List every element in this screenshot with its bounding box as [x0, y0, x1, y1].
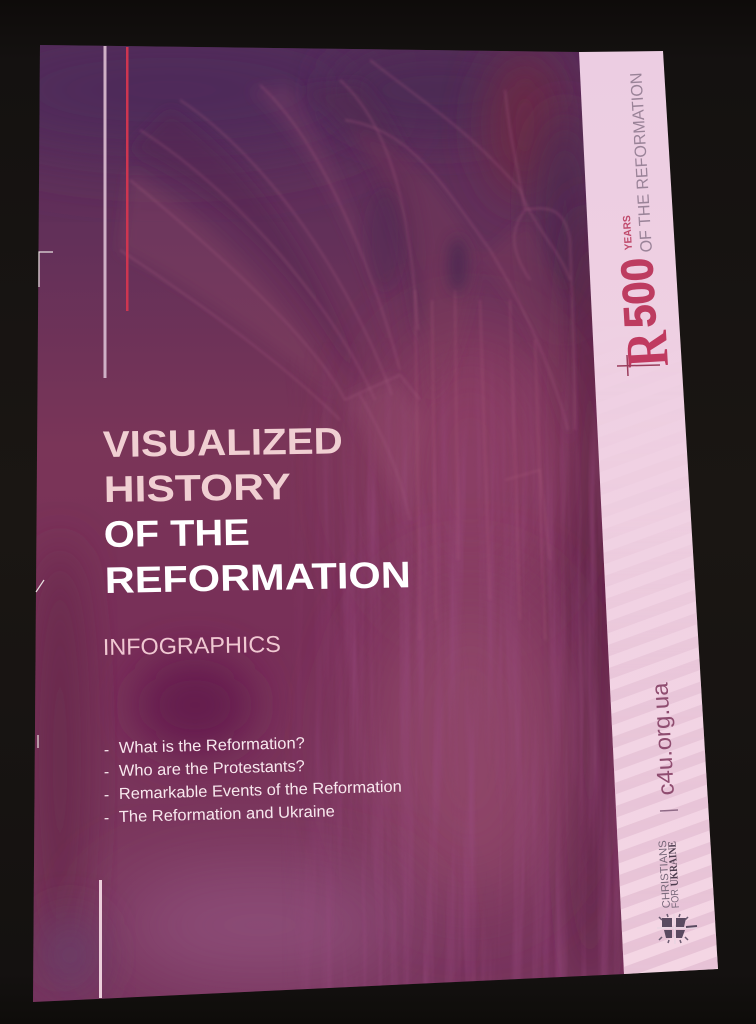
title: HISTORY	[103, 466, 291, 510]
organisation name: FOR	[669, 889, 682, 909]
website: c4u.org.ua	[646, 682, 679, 796]
vault sectors	[125, 87, 562, 454]
contents list: What is the Reformation?	[119, 735, 305, 757]
title	[102, 420, 411, 601]
500: 500	[611, 257, 666, 329]
contents list: -	[104, 764, 109, 781]
logo: R500 years of the Reformation	[611, 72, 681, 376]
icon: cross emblem	[657, 914, 697, 944]
vertical stone streaks	[318, 432, 620, 988]
title: REFORMATION	[104, 554, 411, 601]
contents list: Who are the Protestants?	[119, 758, 305, 780]
organisation name: CHRISTIANS	[657, 840, 673, 909]
panel: pale side strip	[579, 51, 718, 974]
contents list: Remarkable Events of the Reformation	[119, 779, 402, 803]
decorative white line bottom	[99, 880, 102, 998]
staples on spine	[36, 252, 53, 748]
vault ribs	[120, 60, 576, 428]
decorative white line top	[104, 46, 106, 378]
vertical column lines	[414, 292, 543, 502]
dark vault pockets	[374, 221, 472, 294]
title: OF THE	[103, 512, 250, 555]
logo mark: R with cross: R	[613, 329, 681, 369]
contents list: -	[104, 810, 109, 827]
contents list: The Reformation and Ukraine	[119, 803, 335, 826]
contents list: -	[104, 787, 109, 804]
organisation name	[657, 840, 682, 909]
decorative red line	[126, 47, 128, 311]
organisation name: UKRAINE	[666, 841, 681, 887]
diagonal stripe pattern	[606, 570, 718, 974]
years: YEARS	[621, 215, 635, 251]
logo: Christians for Ukraine	[657, 840, 697, 944]
separator	[660, 810, 678, 811]
of the reformation: OF THE REFORMATION	[627, 72, 656, 253]
title: VISUALIZED	[102, 420, 343, 465]
subtitle: infographics: INFOGRAPHICS	[103, 631, 281, 660]
contents list: -	[104, 742, 109, 759]
tonal blotches	[0, 30, 612, 1000]
contents list	[104, 735, 402, 827]
